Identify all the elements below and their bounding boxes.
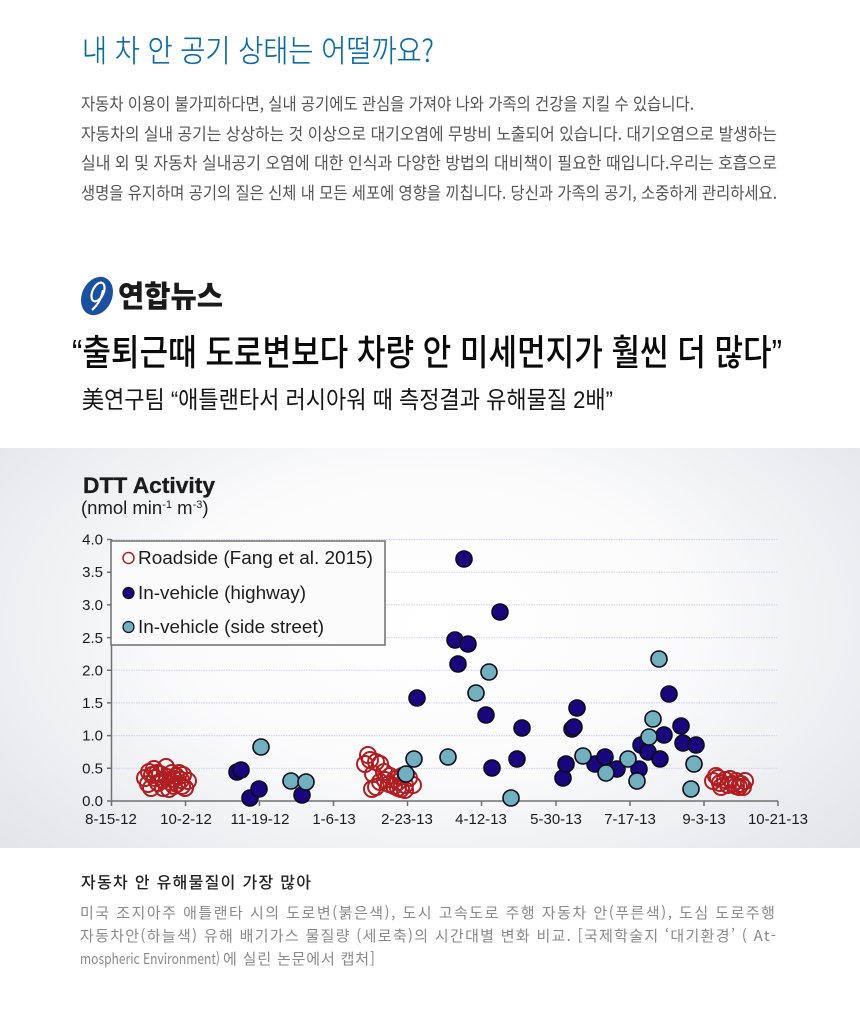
y axis labels: 1.0 bbox=[82, 728, 103, 744]
x axis labels: 9-3-13 bbox=[682, 811, 726, 828]
chart unit label: m bbox=[172, 497, 193, 518]
chart unit label: ) bbox=[202, 497, 209, 518]
title: 내 차 안 공기 상태는 어떨까요? bbox=[82, 26, 434, 71]
y axis labels: 0.0 bbox=[82, 793, 103, 810]
icon: news agency logo bbox=[75, 272, 223, 320]
legend: In-vehicle (side street) bbox=[138, 616, 324, 637]
x axis labels: 4-12-13 bbox=[455, 811, 507, 828]
y axis labels: 1.5 bbox=[82, 695, 103, 712]
intro text block bbox=[81, 90, 777, 204]
legend: Roadside (Fang et al. 2015) bbox=[138, 547, 373, 568]
x axis labels: 8-15-12 bbox=[85, 811, 137, 828]
caption heading: 자동차 안 유해물질이 가장 많아 bbox=[81, 869, 311, 893]
intro text block: 생명을 유지하며 공기의 질은 신체 내 모든 세포에 영향을 끼칩니다. 당신과 가족의 공기, 소중하게 관리하세요. bbox=[81, 179, 777, 204]
intro text block: 자동차의 실내 공기는 상상하는 것 이상으로 대기오염에 무방비 노출되어 있습니다. 대기오염으로 발생하는 bbox=[81, 120, 777, 145]
chart unit label: (nmol min bbox=[81, 497, 162, 518]
chart title: DTT Activity bbox=[83, 473, 215, 498]
x axis labels: 5-30-13 bbox=[530, 811, 582, 828]
intro text block: 자동차 이용이 불가피하다면, 실내 공기에도 관심을 가져야 나와 가족의 건강을 지킬 수 있습니다. bbox=[81, 90, 694, 115]
scatter chart bbox=[82, 532, 808, 828]
legend bbox=[111, 541, 385, 645]
y axis labels: 2.5 bbox=[82, 630, 103, 647]
y axis labels: 2.0 bbox=[82, 662, 103, 680]
icon: news agency logo: 연합뉴스 bbox=[118, 272, 223, 316]
x axis labels bbox=[85, 811, 808, 828]
in-vehicle highway data points bbox=[229, 551, 704, 806]
x axis labels: 7-17-13 bbox=[604, 811, 656, 828]
x axis labels: 10-2-12 bbox=[160, 811, 212, 828]
in-vehicle side street data points bbox=[253, 651, 702, 806]
roadside data points bbox=[137, 747, 753, 798]
x axis labels: 10-21-13 bbox=[748, 811, 808, 828]
legend: In-vehicle (highway) bbox=[138, 582, 306, 603]
caption text: mospheric Environment) bbox=[80, 948, 220, 969]
intro text block: 실내 외 및 자동차 실내공기 오염에 대한 인식과 다양한 방법의 대비책이 필요한 때입니다.우리는 호흡으로 bbox=[81, 149, 777, 174]
x axis labels: 2-23-13 bbox=[381, 811, 433, 828]
y axis labels: 3.0 bbox=[82, 597, 103, 614]
y axis labels bbox=[82, 532, 103, 810]
x axis labels: 11-19-12 bbox=[231, 811, 289, 828]
panel: chart background bbox=[0, 448, 860, 848]
subheadline: 美연구팀 “애틀랜타서 러시아워 때 측정결과 유해물질 2배” bbox=[82, 387, 613, 414]
chart unit label: -1 bbox=[162, 499, 172, 511]
caption text bbox=[80, 902, 776, 969]
y axis labels: 4.0 bbox=[82, 532, 103, 548]
x axis labels: 1-6-13 bbox=[312, 811, 356, 828]
caption text: 에 실린 논문에서 캡처] bbox=[223, 948, 375, 969]
caption text: 미국 조지아주 애틀랜타 시의 도로변(붉은색), 도시 고속도로 주행 자동차 안(푸른색), 도심 도로주행 bbox=[80, 902, 775, 923]
y axis labels: 3.5 bbox=[82, 564, 103, 581]
y axis labels: 0.5 bbox=[82, 760, 103, 778]
chart unit label: -3 bbox=[193, 499, 202, 511]
caption text: 자동차안(하늘색) 유해 배기가스 물질량 (세로축)의 시간대별 변화 비교. [국제학술지 ‘대기환경’ ( At- bbox=[80, 925, 776, 946]
